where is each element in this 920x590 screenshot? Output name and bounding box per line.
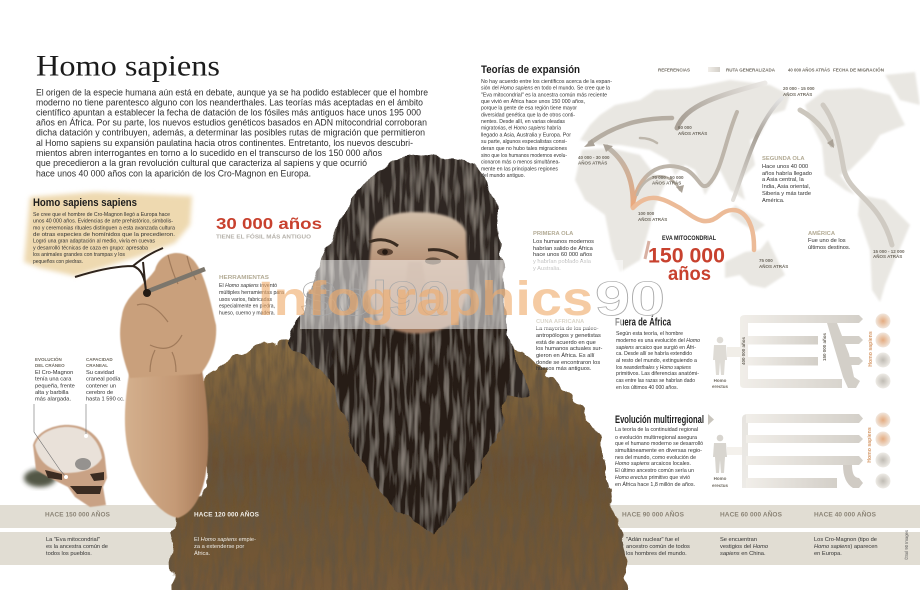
text block: theories: sino que los humanos modernos evolu- xyxy=(481,153,567,159)
beard xyxy=(330,328,512,535)
panel text: de otras especies de homínidos que la precedieron. xyxy=(33,232,175,238)
text block: segunda ola: SEGUNDA OLA xyxy=(762,156,805,162)
text block: segunda ola: América. xyxy=(762,198,785,204)
connector xyxy=(727,447,742,455)
parchment background xyxy=(24,192,192,276)
text block: Evolución multirregional: o evolución multirregional asegura xyxy=(615,435,698,441)
timeline: event 120 000: El Homo sapiens empie- xyxy=(194,537,256,543)
text block: herramientas: El Homo sapiens inventó xyxy=(219,283,277,289)
fur coat xyxy=(170,328,628,590)
stat: 30 000 años: 30 000 años xyxy=(216,216,322,233)
timeline bands xyxy=(0,505,920,565)
cranium cutaway xyxy=(35,427,102,473)
madagascar xyxy=(645,241,649,259)
erectus label: erectus xyxy=(712,483,728,488)
panel text: los animales grandes con trampas y los xyxy=(33,252,125,258)
text block: Fuera de África: moderno es una evolución del Homo xyxy=(616,338,700,344)
date labels xyxy=(578,86,905,269)
text block: segunda ola: Hace unos 40 000 xyxy=(762,164,808,170)
date labels: 15 000 - 12 000 xyxy=(873,249,905,254)
timeline: event 60 000 xyxy=(720,537,768,557)
brain spot xyxy=(75,458,91,470)
main bars xyxy=(740,315,863,388)
text block: Fuera de África xyxy=(616,331,700,391)
timeline: event 40 000: Homo sapiens) aparecen xyxy=(814,544,878,550)
watermark outline number: 90 xyxy=(595,273,665,326)
text block: primera ola xyxy=(533,231,594,272)
intro text: moderno no tiene parentesco alguno con los neanderthales. Las teorías más aceptadas en el ámbito xyxy=(36,97,423,107)
text block: Fuera de África: sapiens arcaico que surgió en Áfri- xyxy=(616,344,696,351)
text block: Fuera de África: al resto del mundo, extinguiendo a xyxy=(616,358,698,364)
diagram: multiregional tree xyxy=(712,412,890,488)
world map xyxy=(575,72,920,302)
diagram: out of Africa tree: 150 000 años xyxy=(822,332,827,361)
text block: Evolución multirregional: simultáneamente en diversas regio- xyxy=(615,448,702,454)
globes xyxy=(876,412,890,488)
face xyxy=(367,212,468,334)
text block: herramientas: múltiples herramientas para xyxy=(219,290,285,296)
timeline: event 150 000 xyxy=(46,537,108,557)
timeline: event 40 000: Los Cro-Magnon (tipo de xyxy=(814,537,877,543)
bars xyxy=(746,414,863,465)
globes xyxy=(876,314,890,388)
timeline: date labels: HACE 120 000 AÑOS xyxy=(194,510,259,518)
text block: herramientas xyxy=(219,275,285,316)
skull shadow xyxy=(24,469,56,487)
panel text: mo y ceremonias rituales distinguen a esta avanzada cultura xyxy=(33,225,176,231)
text block: Evolución multirregional: Homo erectus primitivo que vivió xyxy=(615,475,690,481)
text block: cuna africana: gieron en África. Es allí xyxy=(536,352,595,359)
erectus figure xyxy=(713,435,727,473)
map legend: 40 000 AÑOS ATRÁS xyxy=(788,66,830,72)
migration routes xyxy=(590,83,892,250)
text block: skull evolution: EVOLUCIÓN xyxy=(35,355,62,362)
text block: cuna africana: está de acuerdo en que xyxy=(536,340,596,346)
timeline: event 40 000: en Europa. xyxy=(814,551,842,557)
stat: Eva mitocondrial 150 000 años: años xyxy=(668,264,711,285)
date labels: AÑOS ATRÁS xyxy=(638,216,667,222)
timeline: event 150 000: todos los pueblos. xyxy=(46,551,92,557)
text block: skull evolution: más alargada. xyxy=(35,396,71,402)
text block: theories: diversidad genética que la de otros conti- xyxy=(481,112,575,118)
panel text: y desarrolló técnicas de caza en grupo: apresaba xyxy=(33,245,149,251)
panel text xyxy=(33,212,176,265)
text block: cuna africana: los humanos actuales sur- xyxy=(536,346,602,352)
text block: theories: mente en las principales regiones xyxy=(481,166,558,172)
text block: theories: del mundo antiguo. xyxy=(481,173,525,179)
text block: Evolución multirregional: nes del mundo, como evolución de xyxy=(615,455,696,461)
branch xyxy=(843,465,863,488)
text block: theories: "Eva mitocondrial" es la ancestra común más reciente xyxy=(481,92,607,98)
text block: skull evolution: tenía una cara xyxy=(35,376,72,382)
connector xyxy=(727,347,740,357)
text block: Evolución multirregional: que el humano moderno se desarrolló xyxy=(615,441,703,447)
date labels: 40 000 - 30 000 xyxy=(578,155,610,160)
timeline: date labels: HACE 150 000 AÑOS xyxy=(45,510,110,518)
text block: herramientas: HERRAMIENTAS xyxy=(219,275,269,281)
text block: theories xyxy=(481,79,612,179)
hair xyxy=(288,155,530,400)
intro text: científico apuntan a establecer la fecha de datación de los fósiles más antiguos hace unos 195 000 xyxy=(36,108,421,118)
illustration: skull xyxy=(24,404,107,507)
text block: Evolución multirregional: Homo sapiens arcaicos locales. xyxy=(615,461,691,467)
timeline: event 60 000: sapiens en China. xyxy=(720,551,766,557)
text block: skull evolution: El Cro-Magnon xyxy=(35,370,73,376)
diagram: out of Africa tree xyxy=(712,314,890,389)
watermark xyxy=(258,260,665,329)
timeline: date labels xyxy=(45,510,876,518)
panel text: Se cree que el hombre de Cro-Magnon llegó a Europa hace xyxy=(33,212,170,218)
text block: cuna africana xyxy=(536,319,602,372)
stat: 30 000 años: TIENE EL FÓSIL MÁS ANTIGUO xyxy=(216,232,312,240)
text block: primera ola: PRIMERA OLA xyxy=(533,231,574,237)
date labels: AÑOS ATRÁS xyxy=(783,91,812,97)
text block: theories: llegado a Asia, Australia y Europa. Por xyxy=(481,132,571,138)
illustration: Homo sapiens man xyxy=(170,155,628,590)
stat: Eva mitocondrial 150 000 años: EVA MITOCONDRIAL xyxy=(662,236,716,242)
homo sapiens label: Homo sapiens xyxy=(867,427,873,463)
knuckles xyxy=(137,255,196,372)
image credit: ©Sol 90 Images xyxy=(904,529,909,560)
panel text: Logró una gran adaptación al medio, vivía en cuevas xyxy=(33,239,155,245)
timeline: event 150 000: es la ancestra común de xyxy=(46,544,108,550)
timeline: event 120 000: za a extenderse por xyxy=(194,544,244,550)
timeline: event 90 000: los hombres del mundo. xyxy=(626,551,687,557)
date labels: AÑOS ATRÁS xyxy=(652,180,681,186)
text block: cranial capacity: hasta 1 590 cc. xyxy=(86,396,125,402)
text block: theories: No hay acuerdo entre los científicos acerca de la expan- xyxy=(481,79,612,85)
eyebrows and eyes xyxy=(369,240,458,265)
erectus figure xyxy=(713,337,727,375)
intro text: hace unos 40 000 años con la aparición de los Cro-Magnon en Europa. xyxy=(36,168,311,178)
text block: Evolución multirregional: El último ancestro común sería un xyxy=(615,468,694,474)
timeline: event 120 000: África. xyxy=(194,550,211,557)
timeline: event 90 000: ancestro común de todos xyxy=(626,544,690,550)
timeline: event 60 000: vestigios del Homo xyxy=(720,544,768,550)
timeline: event 40 000 xyxy=(814,537,878,557)
text block: cranial capacity: Su cavidad xyxy=(86,370,114,376)
text block: herramientas: hueso, cuerno y madera. xyxy=(219,310,275,316)
date labels: 20 000 - 15 000 xyxy=(783,86,815,91)
fist xyxy=(120,253,216,378)
intro text: mientos abren interrogantes en torno a lo sucedido en el transcurso de los 150 000 años xyxy=(36,148,382,158)
text block: cranial capacity: contener un xyxy=(86,384,116,390)
continents xyxy=(575,72,920,302)
tool handle xyxy=(146,269,205,292)
bone xyxy=(33,425,107,507)
panel heading: Homo sapiens sapiens xyxy=(33,197,137,209)
intro text: El origen de la especie humana aún está en debate, aunque ya se ha podido establecer que el hombre xyxy=(36,87,428,97)
map legend: RUTA GENERALIZADA xyxy=(726,68,776,72)
cord xyxy=(75,248,163,292)
intro text: años en África. Por su parte, los nuevos estudios genéticos basados en ADN mitocondrial corroboran xyxy=(36,118,427,128)
text block: primera ola: habrían salido de África xyxy=(533,245,594,252)
arrowheads xyxy=(584,139,834,193)
eye socket and teeth xyxy=(45,470,104,494)
panel text: unos 40 000 años. Evidencias de arte prehistórico, simbolis- xyxy=(33,218,173,224)
heading: Teorías de expansión: Teorías de expansión xyxy=(481,64,580,76)
text block: Fuera de África: en los últimos 40 000 años. xyxy=(616,385,678,391)
timeline: event 150 000: La "Eva mitocondrial" xyxy=(46,537,100,543)
erectus label: Homo xyxy=(714,476,727,481)
text block: cranial capacity: CAPACIDAD xyxy=(86,357,113,362)
nose and mouth xyxy=(404,262,428,300)
text block: segunda ola: Siberia y más tarde xyxy=(762,191,811,197)
text block: theories: nentes. Desde allí, en varias oleadas xyxy=(481,119,565,125)
text block: theories: cionaron más o menos simultánea- xyxy=(481,160,560,166)
text block: cranial capacity: craneal podía xyxy=(86,376,121,382)
timeline: date labels: HACE 90 000 AÑOS xyxy=(622,510,684,518)
text block: cuna africana: huesos más antiguos. xyxy=(536,366,592,372)
date labels: 75 000 xyxy=(759,258,773,263)
text block: Fuera de África: los neanderthales y Homo sapiens xyxy=(616,365,691,371)
watermark orange text: Infographics xyxy=(258,273,593,326)
text block: primera ola: hace unos 60 000 años xyxy=(533,252,592,258)
text block: theories: porque la gente de esa región tiene mayor xyxy=(481,106,577,112)
text block: cuna africana: CUNA AFRICANA xyxy=(536,319,585,325)
text block: Fuera de África: Según esta teoría, el hombre xyxy=(616,331,683,337)
heading: Evolución multirregional: Evolución multirregional xyxy=(615,414,704,426)
text block: segunda ola xyxy=(762,156,812,204)
illustration: raised arm and hand with tool xyxy=(75,248,216,518)
homo sapiens label: Homo sapiens xyxy=(868,331,874,367)
text block: segunda ola: India, Asia oriental, xyxy=(762,184,810,190)
watermark band xyxy=(300,260,623,329)
text block: skull evolution: alta y barbilla xyxy=(35,390,69,396)
text block: cranial capacity xyxy=(86,357,125,402)
duration labels: 400 000 años xyxy=(741,336,746,365)
timeline: event 60 000: Se encuentran xyxy=(720,537,757,543)
timeline: date labels: HACE 60 000 AÑOS xyxy=(720,510,782,518)
text block: theories: sión del Homo sapiens en todo el mundo. Se cree que la xyxy=(481,86,611,92)
text block: Evolución multirregional xyxy=(615,427,703,488)
text block: skull evolution xyxy=(35,355,75,402)
panel: Homo sapiens sapiens on parchment xyxy=(24,192,192,276)
intro text: que precedieron a la gran revolución cultural que caracteriza al sapiens y que ocurrió xyxy=(36,158,367,168)
forearm xyxy=(125,362,208,518)
date labels: 70 000 - 50 000 xyxy=(652,175,684,180)
date labels: AÑOS ATRÁS xyxy=(759,263,788,269)
text block: skull evolution: DEL CRÁNEO xyxy=(35,362,65,368)
text block: theories: que vivió en África hace unos 150 000 años, xyxy=(481,98,585,105)
text block: cuna africana: La mayoría de los paleo- xyxy=(536,326,599,332)
watermark outline text: Sol90 xyxy=(300,273,450,326)
text block: primera ola: y habrían poblado Asia xyxy=(533,259,592,265)
date labels: AÑOS ATRÁS xyxy=(678,130,707,136)
text block: Evolución multirregional: en África hace 1,8 millón de años. xyxy=(615,481,695,488)
stat: Eva mitocondrial 150 000 años: 150 000 xyxy=(648,244,725,268)
text block: theories: migratorias, el Homo sapiens habría xyxy=(481,126,562,132)
map legend xyxy=(658,66,884,72)
text block: cuna africana: antropólogos y genetistas xyxy=(536,333,601,339)
erectus label xyxy=(712,476,728,488)
title: Homo sapiens xyxy=(36,50,220,82)
leader dots xyxy=(64,434,88,479)
timeline: date labels: HACE 40 000 AÑOS xyxy=(814,510,876,518)
date labels: 100 000 xyxy=(638,211,655,216)
intro text: al Homo sapiens su expansión paulatina hacia otros continentes. Entretanto, los nuevos descubri- xyxy=(36,138,413,148)
text block: primera ola: y Australia. xyxy=(533,266,561,272)
timeline: event 90 000: "Adán nuclear" fue el xyxy=(626,537,679,543)
text block: Fuera de África: primitivos. Las diferencias anatómi- xyxy=(616,371,699,377)
text block: cuna africana: donde se encontraron los xyxy=(536,360,600,366)
date labels: AÑOS ATRÁS xyxy=(578,160,607,166)
text block: primera ola: Los humanos modernos xyxy=(533,239,594,245)
vertical stem xyxy=(742,414,748,488)
text block: herramientas: especialmente en piedra, xyxy=(219,304,275,310)
text block: Evolución multirregional: La teoría de la continuidad regional xyxy=(615,427,698,433)
knot xyxy=(143,289,151,297)
date labels: AÑOS ATRÁS xyxy=(873,253,902,259)
text block: américa: AMÉRICA xyxy=(808,229,836,237)
intro text: dicha datación y contribuyen, además, a determinar las posibles rutas de migración que permitieron xyxy=(36,128,425,138)
text block: Fuera de África: cas entre las razas se habrían dado xyxy=(616,378,695,384)
text block: Fuera de África: ca. Desde allí se habría extendido xyxy=(616,351,692,357)
timeline: event 120 000 xyxy=(194,537,256,557)
erectus label: Homo xyxy=(714,378,727,383)
erectus label xyxy=(712,378,728,389)
text block: theories: su parte, algunos especialistas consi- xyxy=(481,139,567,145)
text block: américa: Fue uno de los xyxy=(808,238,846,244)
text block: cranial capacity: CRANEAL xyxy=(86,363,108,368)
date labels: 60 000 xyxy=(678,125,692,130)
branching trunk xyxy=(827,323,860,388)
erectus label: erectus xyxy=(712,384,728,389)
text block: skull evolution: pequeña, frente xyxy=(35,384,75,390)
heading: Fuera de África: Fuera de África xyxy=(615,316,672,328)
stat: Eva mitocondrial 150 000 años xyxy=(648,236,725,285)
text block: theories: deran que no hubo tales migraciones xyxy=(481,146,567,152)
map legend: REFERENCIAS xyxy=(658,68,690,72)
text block: américa xyxy=(808,229,851,251)
stat: 30 000 años xyxy=(216,216,322,240)
map legend: FECHA DE MIGRACIÓN xyxy=(833,66,884,72)
text block: herramientas: usos varios, fabricadas xyxy=(219,297,272,303)
leader lines xyxy=(34,404,86,477)
text block: cranial capacity: cerebro de xyxy=(86,390,113,396)
text block: segunda ola: a Asia central, la xyxy=(762,177,805,183)
panel text: pequeños con piedras. xyxy=(33,259,83,265)
text block: segunda ola: años habría llegado xyxy=(762,171,812,177)
text block: américa: últimos destinos. xyxy=(808,245,851,251)
timeline: event 90 000 xyxy=(626,537,690,557)
intro text xyxy=(36,87,428,178)
